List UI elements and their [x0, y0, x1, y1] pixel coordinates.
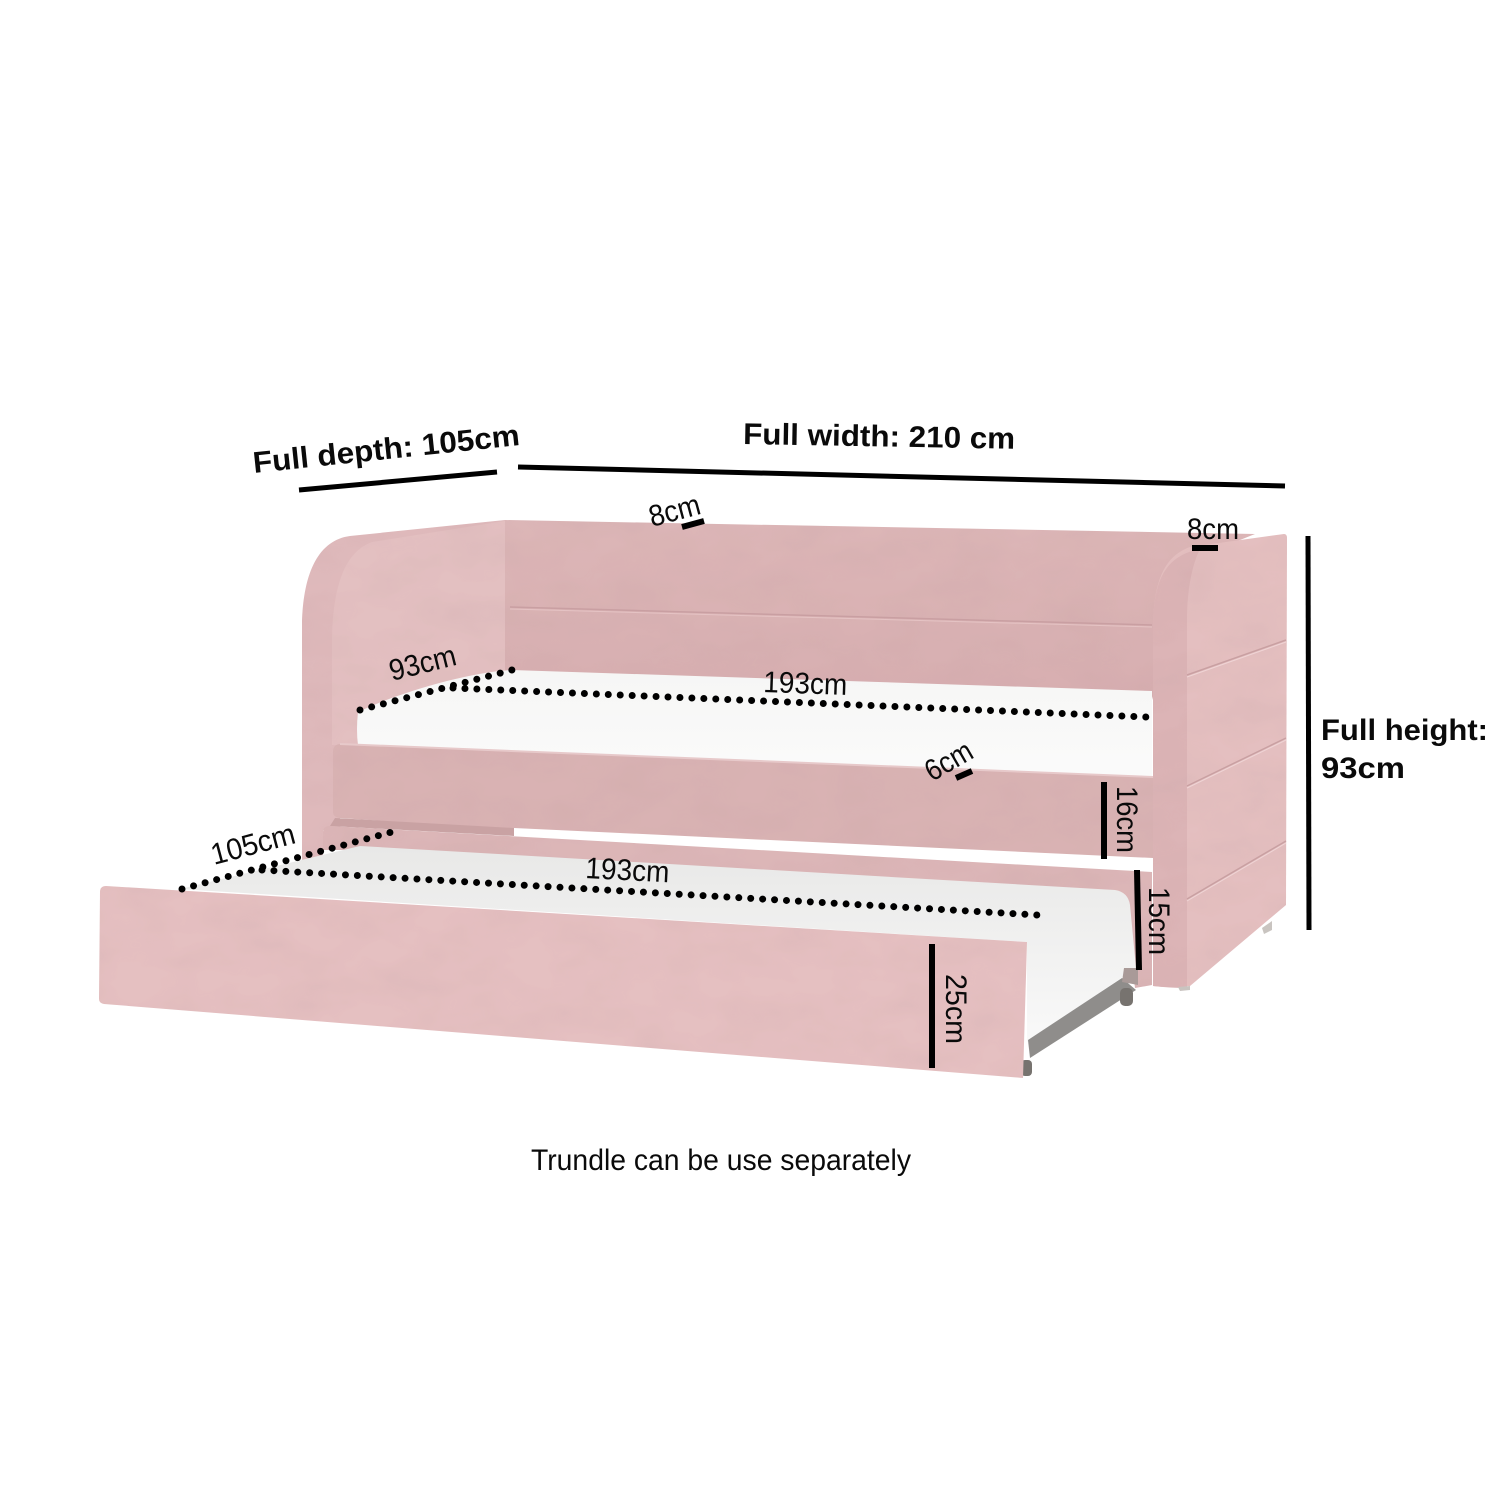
heading: full height: 93cm: [1321, 752, 1405, 785]
dotted measurement: upper mattress depth: [360, 670, 512, 710]
label: mattress length: 193cm: [763, 666, 848, 702]
gap under rail: [514, 828, 1153, 874]
daybed front rail: [330, 744, 1153, 863]
heading: full height: Full height:: [1321, 714, 1488, 747]
label: arm thickness: 8cm: [1187, 513, 1239, 546]
dotted measurement: trundle depth: [182, 832, 390, 889]
label: rail thickness: 6cm: [919, 734, 979, 788]
dotted measurement: trundle length: [262, 870, 1037, 915]
caption: Trundle can be use separately: [531, 1144, 911, 1177]
label: mattress depth: 93cm: [386, 639, 460, 688]
illustration: daybed frame: [302, 520, 1287, 991]
label: trundle front height: 25cm: [939, 974, 972, 1044]
heading: full height: [1321, 714, 1488, 785]
label: trundle length: 193cm: [585, 852, 670, 889]
backrest: [505, 520, 1255, 700]
illustration: pull-out trundle: [99, 826, 1152, 1078]
label: trundle rail height: 15cm: [1142, 887, 1175, 955]
measurement ticks and dimension lines: [299, 467, 1309, 1068]
label: rail height: 16cm: [1110, 786, 1143, 853]
heading: full depth: Full depth: 105cm: [251, 419, 521, 480]
heading: full width: Full width: 210 cm: [743, 418, 1015, 456]
right armrest: [1153, 534, 1287, 991]
dotted measurement: upper mattress length: [453, 688, 1146, 717]
label: backrest thickness: 8cm: [645, 488, 704, 534]
label: trundle depth: 105cm: [207, 818, 299, 872]
left armrest: [302, 520, 505, 860]
upper mattress: [357, 670, 1152, 785]
trundle front panel: [99, 886, 1027, 1078]
trundle back rail: [323, 826, 1152, 988]
trundle mattress: [180, 846, 1136, 1042]
trundle metal frame: [1021, 968, 1138, 1076]
